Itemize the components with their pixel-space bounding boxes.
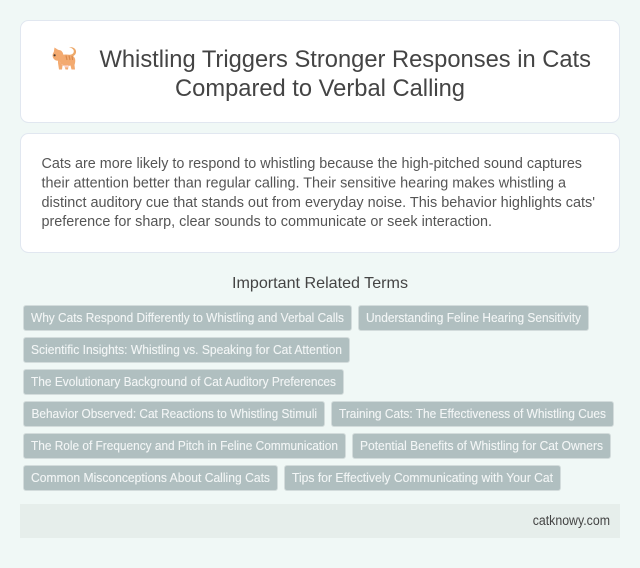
tag 3 (24, 338, 350, 362)
tag 10: Tips for Effectively Communicating with Your Cat (292, 470, 553, 485)
heading: related terms: Important Related Terms (232, 275, 408, 292)
tag 4: The Evolutionary Background of Cat Auditory Preferences (31, 374, 336, 389)
title text: Whistling Triggers Stronger Responses in Cats (100, 46, 591, 73)
tag 9: Common Misconceptions About Calling Cats (31, 470, 270, 485)
tag 7: The Role of Frequency and Pitch in Feline Communication (31, 438, 338, 453)
tag 5: Behavior Observed: Cat Reactions to Whistling Stimuli (32, 406, 317, 421)
icon: cat (53, 47, 76, 70)
tag 6: Training Cats: The Effectiveness of Whistling Cues (339, 406, 606, 421)
title text (100, 46, 591, 102)
tag 5 (24, 402, 324, 426)
tag 1: Why Cats Respond Differently to Whistling and Verbal Calls (31, 310, 344, 325)
tag 3: Scientific Insights: Whistling vs. Speaking for Cat Attention (31, 342, 342, 357)
tag 7 (24, 434, 346, 458)
footer bar (20, 504, 620, 538)
title text: Compared to Verbal Calling (175, 75, 465, 102)
panel: description (20, 134, 620, 252)
tag cloud: related terms (24, 306, 614, 490)
body text (42, 155, 595, 230)
body text: their attention better than regular calling. Their sensitive hearing makes whistling a (42, 174, 567, 192)
panel: title card (20, 20, 620, 122)
tag 10 (284, 466, 560, 490)
footer site name: catknowy.com (533, 513, 610, 528)
tag 6 (332, 402, 614, 426)
body text: Cats are more likely to respond to whistling because the high-pitched sound captures (42, 155, 582, 172)
tag 2: Understanding Feline Hearing Sensitivity (366, 310, 581, 325)
tag 9 (24, 466, 278, 490)
tag 1 (24, 306, 352, 330)
tag 2 (358, 306, 588, 330)
tag 8 (352, 434, 610, 458)
tag 8: Potential Benefits of Whistling for Cat Owners (360, 438, 603, 453)
body text: distinct auditory cue that stands out from everyday noise. This behavior highlights cats' (42, 194, 595, 211)
tag 4 (24, 370, 344, 394)
body text: preference for sharp, clear sounds to communicate or seek interaction. (42, 213, 492, 230)
